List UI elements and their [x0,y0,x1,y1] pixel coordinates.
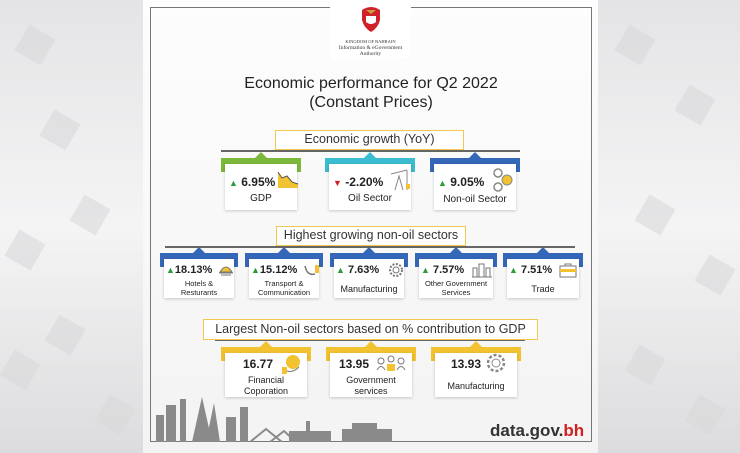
logo [330,0,411,59]
card: government services: Government [346,375,396,385]
card: other government: Services [442,288,470,297]
card: GDP [221,152,301,212]
card: hotels: ▲18.13% [166,264,212,276]
card: Non-oil: Non-oil Sector [443,194,507,205]
card: Non-oil: ▲ 9.05% [438,175,484,189]
card: government services: services [354,386,388,396]
header: highest growing [276,226,466,246]
footer brand: data.gov.bh [490,421,584,440]
card: hotels: Resturants [181,288,217,297]
logo: KINGDOM OF BAHRAIN [345,39,396,44]
card: GDP: GDP [250,193,272,204]
card: other government: Other Government [425,279,487,288]
card: Oil [325,152,415,212]
header: highest growing: Highest growing non-oil sectors [284,228,458,242]
logo: Information & eGovernment [339,44,402,50]
card: manufacturing [431,341,521,400]
skyline [156,397,392,442]
card: financial: Financial [248,375,284,385]
card: financial: 16.77 [243,357,273,371]
card: trade: ▲ 7.51% [509,264,552,276]
title: Economic performance for Q2 2022 [244,75,498,92]
card: transport: ▲15.12% [251,264,297,276]
card: other government: ▲ 7.57% [421,264,464,276]
logo: Authority [360,51,381,57]
card: trade: Trade [531,284,555,294]
header: largest non-oil: Largest Non-oil sectors based on % contribution to GDP [215,322,526,336]
card: transport: Transport & [265,279,303,288]
card: Oil: ▼ -2.20% [333,175,383,189]
title [244,75,498,111]
card: financial [221,341,311,400]
header: economic growth [275,130,464,150]
card: transport [245,247,323,300]
section 3 line [215,339,525,340]
card: manufacturing [330,247,408,300]
card: hotels [160,247,238,300]
card: government services [326,341,416,400]
card: GDP: ▲ 6.95% [229,175,275,189]
card: Non-oil [430,152,520,212]
title: (Constant Prices) [309,94,433,111]
card: Oil: Oil Sector [348,193,392,204]
card: manufacturing: Manufacturing [340,284,398,294]
card: financial: Coporation [244,386,288,396]
card: manufacturing: ▲ 7.63% [336,264,379,276]
main panel [143,0,598,453]
card: manufacturing: Manufacturing [447,381,505,391]
card: trade [503,247,583,300]
card: transport: Communication [258,288,310,297]
header: economic growth: Economic growth (YoY) [304,132,435,146]
card: hotels: Hotels & [185,279,213,288]
card: manufacturing: 13.93 [451,357,481,371]
section 2 line [165,246,575,248]
card: government services: 13.95 [339,357,369,371]
header: largest non-oil [203,319,538,340]
section 1 line [221,150,520,152]
card: other government [415,247,497,300]
